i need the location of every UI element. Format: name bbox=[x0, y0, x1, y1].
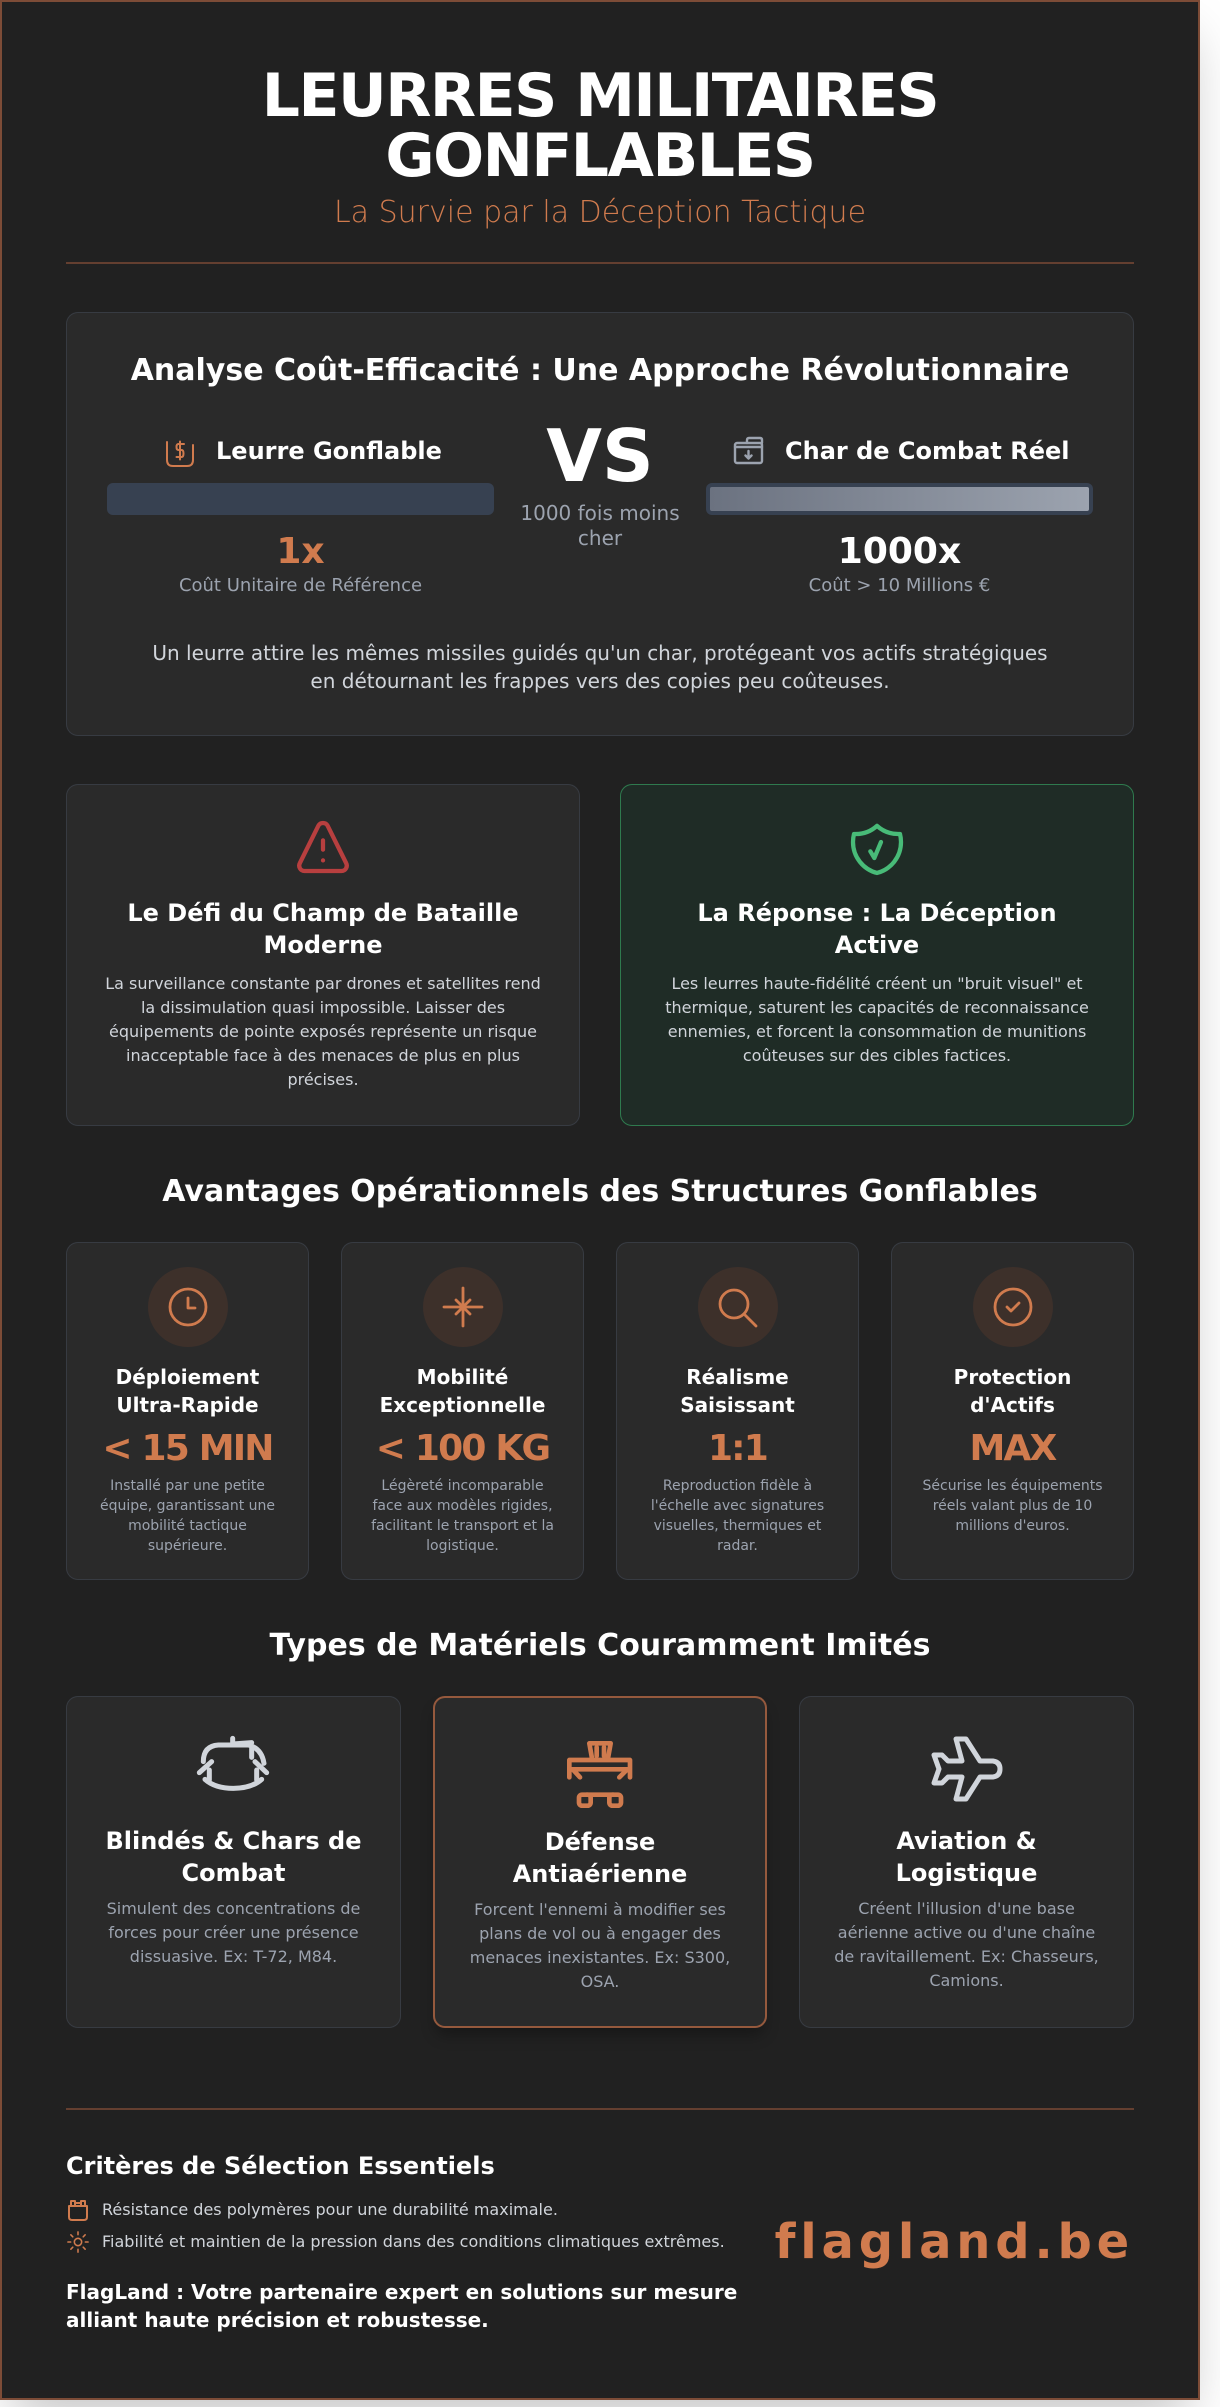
metric: < 100 KG bbox=[376, 1428, 549, 1469]
VS badge: VS bbox=[546, 414, 654, 498]
description: Camions. bbox=[929, 1971, 1004, 1990]
description: mobilité tactique bbox=[128, 1518, 247, 1534]
panel: cost-effectiveness analysis bbox=[66, 312, 1134, 736]
title bbox=[680, 1365, 795, 1417]
icon: warning bbox=[297, 820, 349, 874]
card: armored vehicles bbox=[66, 1696, 401, 2028]
partner statement: alliant haute précision et robustesse. bbox=[66, 2308, 489, 2332]
description: équipe, garantissant une bbox=[100, 1498, 275, 1514]
caption: reference unit cost: Coût Unitaire de Référence bbox=[179, 575, 422, 596]
title: Logistique bbox=[896, 1859, 1037, 1887]
description: millions d'euros. bbox=[955, 1518, 1070, 1534]
heading: selection criteria: Critères de Sélection Essentiels bbox=[66, 2152, 495, 2180]
title: d'Actifs bbox=[970, 1393, 1055, 1417]
icon: airplane bbox=[932, 1736, 1002, 1802]
card: air defense (featured) bbox=[433, 1696, 767, 2028]
caption: 1000 times cheaper: 1000 fois moins bbox=[520, 501, 680, 525]
body text: précises. bbox=[287, 1070, 359, 1089]
body text: inacceptable face à des menaces de plus en plus bbox=[126, 1046, 520, 1065]
label: inflatable decoy: Leurre Gonflable bbox=[216, 437, 442, 465]
icon: sparkle bbox=[423, 1267, 503, 1347]
explanatory text: Un leurre attire les mêmes missiles guidés qu'un char, protégeant vos actifs stratégiques bbox=[152, 641, 1048, 665]
title bbox=[954, 1365, 1071, 1417]
description: plans de vol ou à engager des bbox=[479, 1924, 721, 1943]
title bbox=[380, 1365, 545, 1417]
heading: La Réponse : La Déception bbox=[697, 899, 1057, 927]
heading: Le Défi du Champ de Bataille bbox=[127, 899, 519, 927]
description bbox=[651, 1478, 824, 1554]
caption: cost above 10 million: Coût > 10 Millions € bbox=[809, 575, 990, 596]
icon: real tank cost bbox=[734, 436, 764, 464]
description: menaces inexistantes. Ex: S300, bbox=[470, 1948, 730, 1967]
criterion: polymer resistance: Résistance des polymères pour une durabilité maximale. bbox=[102, 2200, 558, 2219]
description: visuelles, thermiques et bbox=[654, 1518, 821, 1534]
title bbox=[116, 1365, 259, 1417]
icon: sun bbox=[67, 2231, 89, 2253]
icon: armored vehicle bbox=[196, 1736, 270, 1791]
card: striking realism bbox=[616, 1242, 859, 1580]
title: Mobilité bbox=[417, 1365, 508, 1389]
explanatory text bbox=[152, 641, 1048, 693]
body text: coûteuses sur des cibles factices. bbox=[743, 1046, 1011, 1065]
explanatory text: en détournant les frappes vers des copies peu coûteuses. bbox=[310, 669, 890, 693]
description: Forcent l'ennemi à modifier ses bbox=[474, 1900, 726, 1919]
description: Légèreté incomparable bbox=[381, 1478, 544, 1494]
heading bbox=[127, 899, 519, 959]
metric: MAX bbox=[969, 1428, 1056, 1469]
partner statement: FlagLand : Votre partenaire expert en solutions sur mesure bbox=[66, 2280, 737, 2304]
title: Combat bbox=[182, 1859, 285, 1887]
metric: 1:1 bbox=[708, 1428, 767, 1469]
label: real battle tank: Char de Combat Réel bbox=[785, 437, 1069, 465]
description: logistique. bbox=[426, 1538, 499, 1554]
title: Protection bbox=[954, 1365, 1071, 1389]
card: rapid deployment bbox=[66, 1242, 309, 1580]
description: supérieure. bbox=[148, 1538, 227, 1554]
icon: polymer material bbox=[68, 2200, 88, 2221]
bar: decoy cost bbox=[107, 483, 494, 515]
title: Exceptionnelle bbox=[380, 1393, 545, 1417]
card: aviation and logistics bbox=[799, 1696, 1134, 2028]
title: Défense bbox=[545, 1828, 655, 1856]
body text bbox=[105, 974, 541, 1089]
card: exceptional mobility bbox=[341, 1242, 584, 1580]
body text: La surveillance constante par drones et satellites rend bbox=[105, 974, 541, 993]
description bbox=[470, 1900, 730, 1991]
section heading: imitated equipment types: Types de Matériels Couramment Imités bbox=[270, 1628, 930, 1663]
partner statement bbox=[66, 2280, 737, 2332]
description: Simulent des concentrations de bbox=[107, 1899, 360, 1918]
title bbox=[896, 1827, 1037, 1887]
description: facilitant le transport et la bbox=[371, 1518, 554, 1534]
title bbox=[512, 1828, 687, 1888]
caption: 1000 times cheaper: cher bbox=[578, 526, 622, 550]
icon: shield check bbox=[850, 824, 904, 876]
description: forces pour créer une présence bbox=[108, 1923, 359, 1942]
metric: < 15 MIN bbox=[102, 1428, 273, 1469]
heading: Moderne bbox=[263, 931, 383, 959]
icon: clock bbox=[148, 1267, 228, 1347]
title: GONFLABLES bbox=[385, 121, 815, 191]
title: Saisissant bbox=[680, 1393, 795, 1417]
description: dissuasive. Ex: T-72, M84. bbox=[130, 1947, 337, 1966]
title: LEURRES MILITAIRES bbox=[262, 61, 938, 131]
description bbox=[371, 1478, 554, 1554]
description: de ravitaillement. Ex: Chasseurs, bbox=[834, 1947, 1099, 1966]
description: réels valant plus de 10 bbox=[933, 1498, 1092, 1514]
panel: active deception answer bbox=[620, 784, 1134, 1126]
body text bbox=[665, 974, 1089, 1065]
description bbox=[100, 1478, 275, 1554]
body text: Les leurres haute-fidélité créent un "bruit visuel" et bbox=[671, 974, 1083, 993]
icon: air defense launcher bbox=[567, 1741, 632, 1808]
section heading: operational advantages: Avantages Opérationnels des Structures Gonflables bbox=[162, 1174, 1038, 1209]
title: Déploiement bbox=[116, 1365, 259, 1389]
description bbox=[834, 1899, 1099, 1990]
icon: magnifier bbox=[698, 1267, 778, 1347]
body text: thermique, saturent les capacités de reconnaissance bbox=[665, 998, 1089, 1017]
title: Antiaérienne bbox=[513, 1860, 687, 1888]
caption: 1000 times cheaper bbox=[520, 501, 680, 550]
brand: flagland.be: flagland.be bbox=[775, 2214, 1134, 2270]
card: asset protection bbox=[891, 1242, 1134, 1580]
heading: Active bbox=[835, 931, 919, 959]
description: Installé par une petite bbox=[110, 1478, 265, 1494]
bar: real tank cost bbox=[706, 483, 1093, 515]
body text: la dissimulation quasi impossible. Laisser des bbox=[141, 998, 505, 1017]
panel heading: Analyse Coût-Efficacité : Une Approche Révolutionnaire bbox=[131, 353, 1069, 388]
title: Réalisme bbox=[686, 1365, 789, 1389]
description: Reproduction fidèle à bbox=[663, 1478, 812, 1494]
description: radar. bbox=[717, 1538, 758, 1554]
title: Blindés & Chars de bbox=[105, 1827, 362, 1855]
panel: battlefield challenge bbox=[66, 784, 580, 1126]
criterion: pressure reliability: Fiabilité et maintien de la pression dans des conditions climatiques extrêmes. bbox=[102, 2232, 725, 2251]
description: l'échelle avec signatures bbox=[651, 1498, 824, 1514]
description: OSA. bbox=[581, 1972, 619, 1991]
description bbox=[107, 1899, 360, 1966]
description: Sécurise les équipements bbox=[922, 1478, 1102, 1494]
description: aérienne active ou d'une chaîne bbox=[838, 1923, 1095, 1942]
subtitle: La Survie par la Déception Tactique bbox=[334, 195, 866, 230]
body text: ennemies, et forcent la consommation de munitions bbox=[668, 1022, 1086, 1041]
title bbox=[262, 61, 938, 191]
icon: inflatable decoy cost bbox=[166, 440, 194, 467]
value: 1x: 1x bbox=[276, 531, 325, 572]
body text: équipements de pointe exposés représente un risque bbox=[109, 1022, 537, 1041]
title: Aviation & bbox=[896, 1827, 1037, 1855]
bar fill bbox=[710, 487, 1089, 511]
heading bbox=[697, 899, 1057, 959]
title bbox=[105, 1827, 362, 1887]
description: face aux modèles rigides, bbox=[372, 1498, 553, 1514]
description bbox=[922, 1478, 1102, 1534]
value: 1000x: 1000x bbox=[838, 531, 961, 572]
icon: check circle bbox=[973, 1267, 1053, 1347]
description: Créent l'illusion d'une base bbox=[858, 1899, 1075, 1918]
title: Ultra-Rapide bbox=[116, 1393, 259, 1417]
